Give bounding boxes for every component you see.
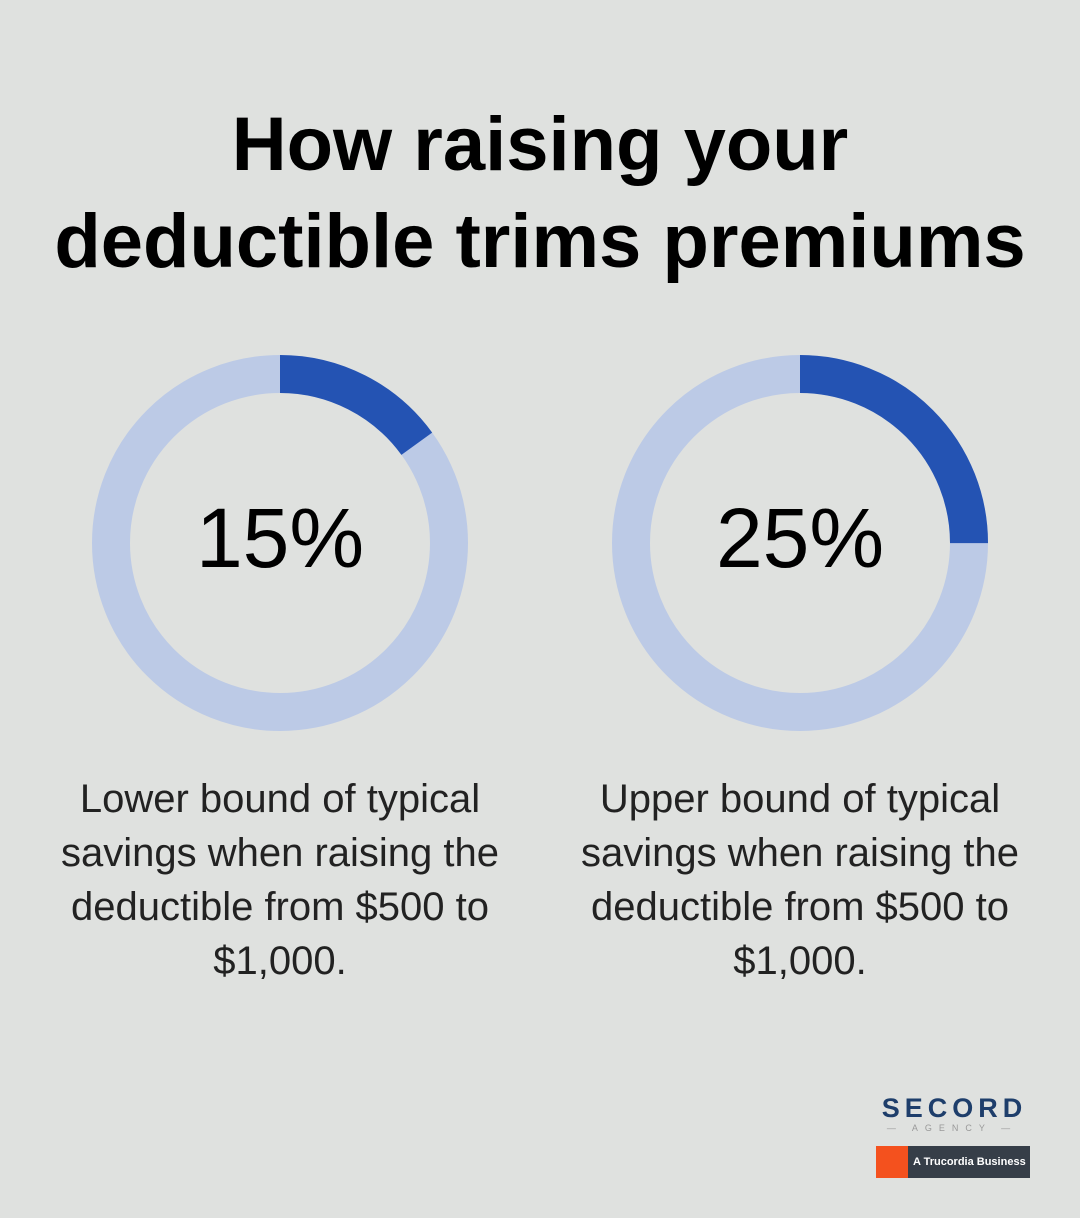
donut: 15% (92, 355, 468, 731)
title (54, 102, 1026, 284)
logo: — AGENCY — (887, 1123, 1017, 1133)
logo (876, 1093, 1030, 1178)
logo: A Trucordia Business (913, 1156, 1026, 1168)
caption: upper bound: Upper bound of typical savings when raising the deductible from $500 to $1,000. (581, 777, 1019, 983)
donut: 25% (612, 355, 988, 731)
logo: SECORD (882, 1093, 1027, 1123)
value: 15%: 15% (196, 491, 364, 585)
title: How raising your (232, 102, 848, 187)
caption: lower bound: Lower bound of typical savings when raising the deductible from $500 to $1,000. (61, 777, 499, 983)
title: deductible trims premiums (54, 199, 1026, 284)
value: 25%: 25% (716, 491, 884, 585)
